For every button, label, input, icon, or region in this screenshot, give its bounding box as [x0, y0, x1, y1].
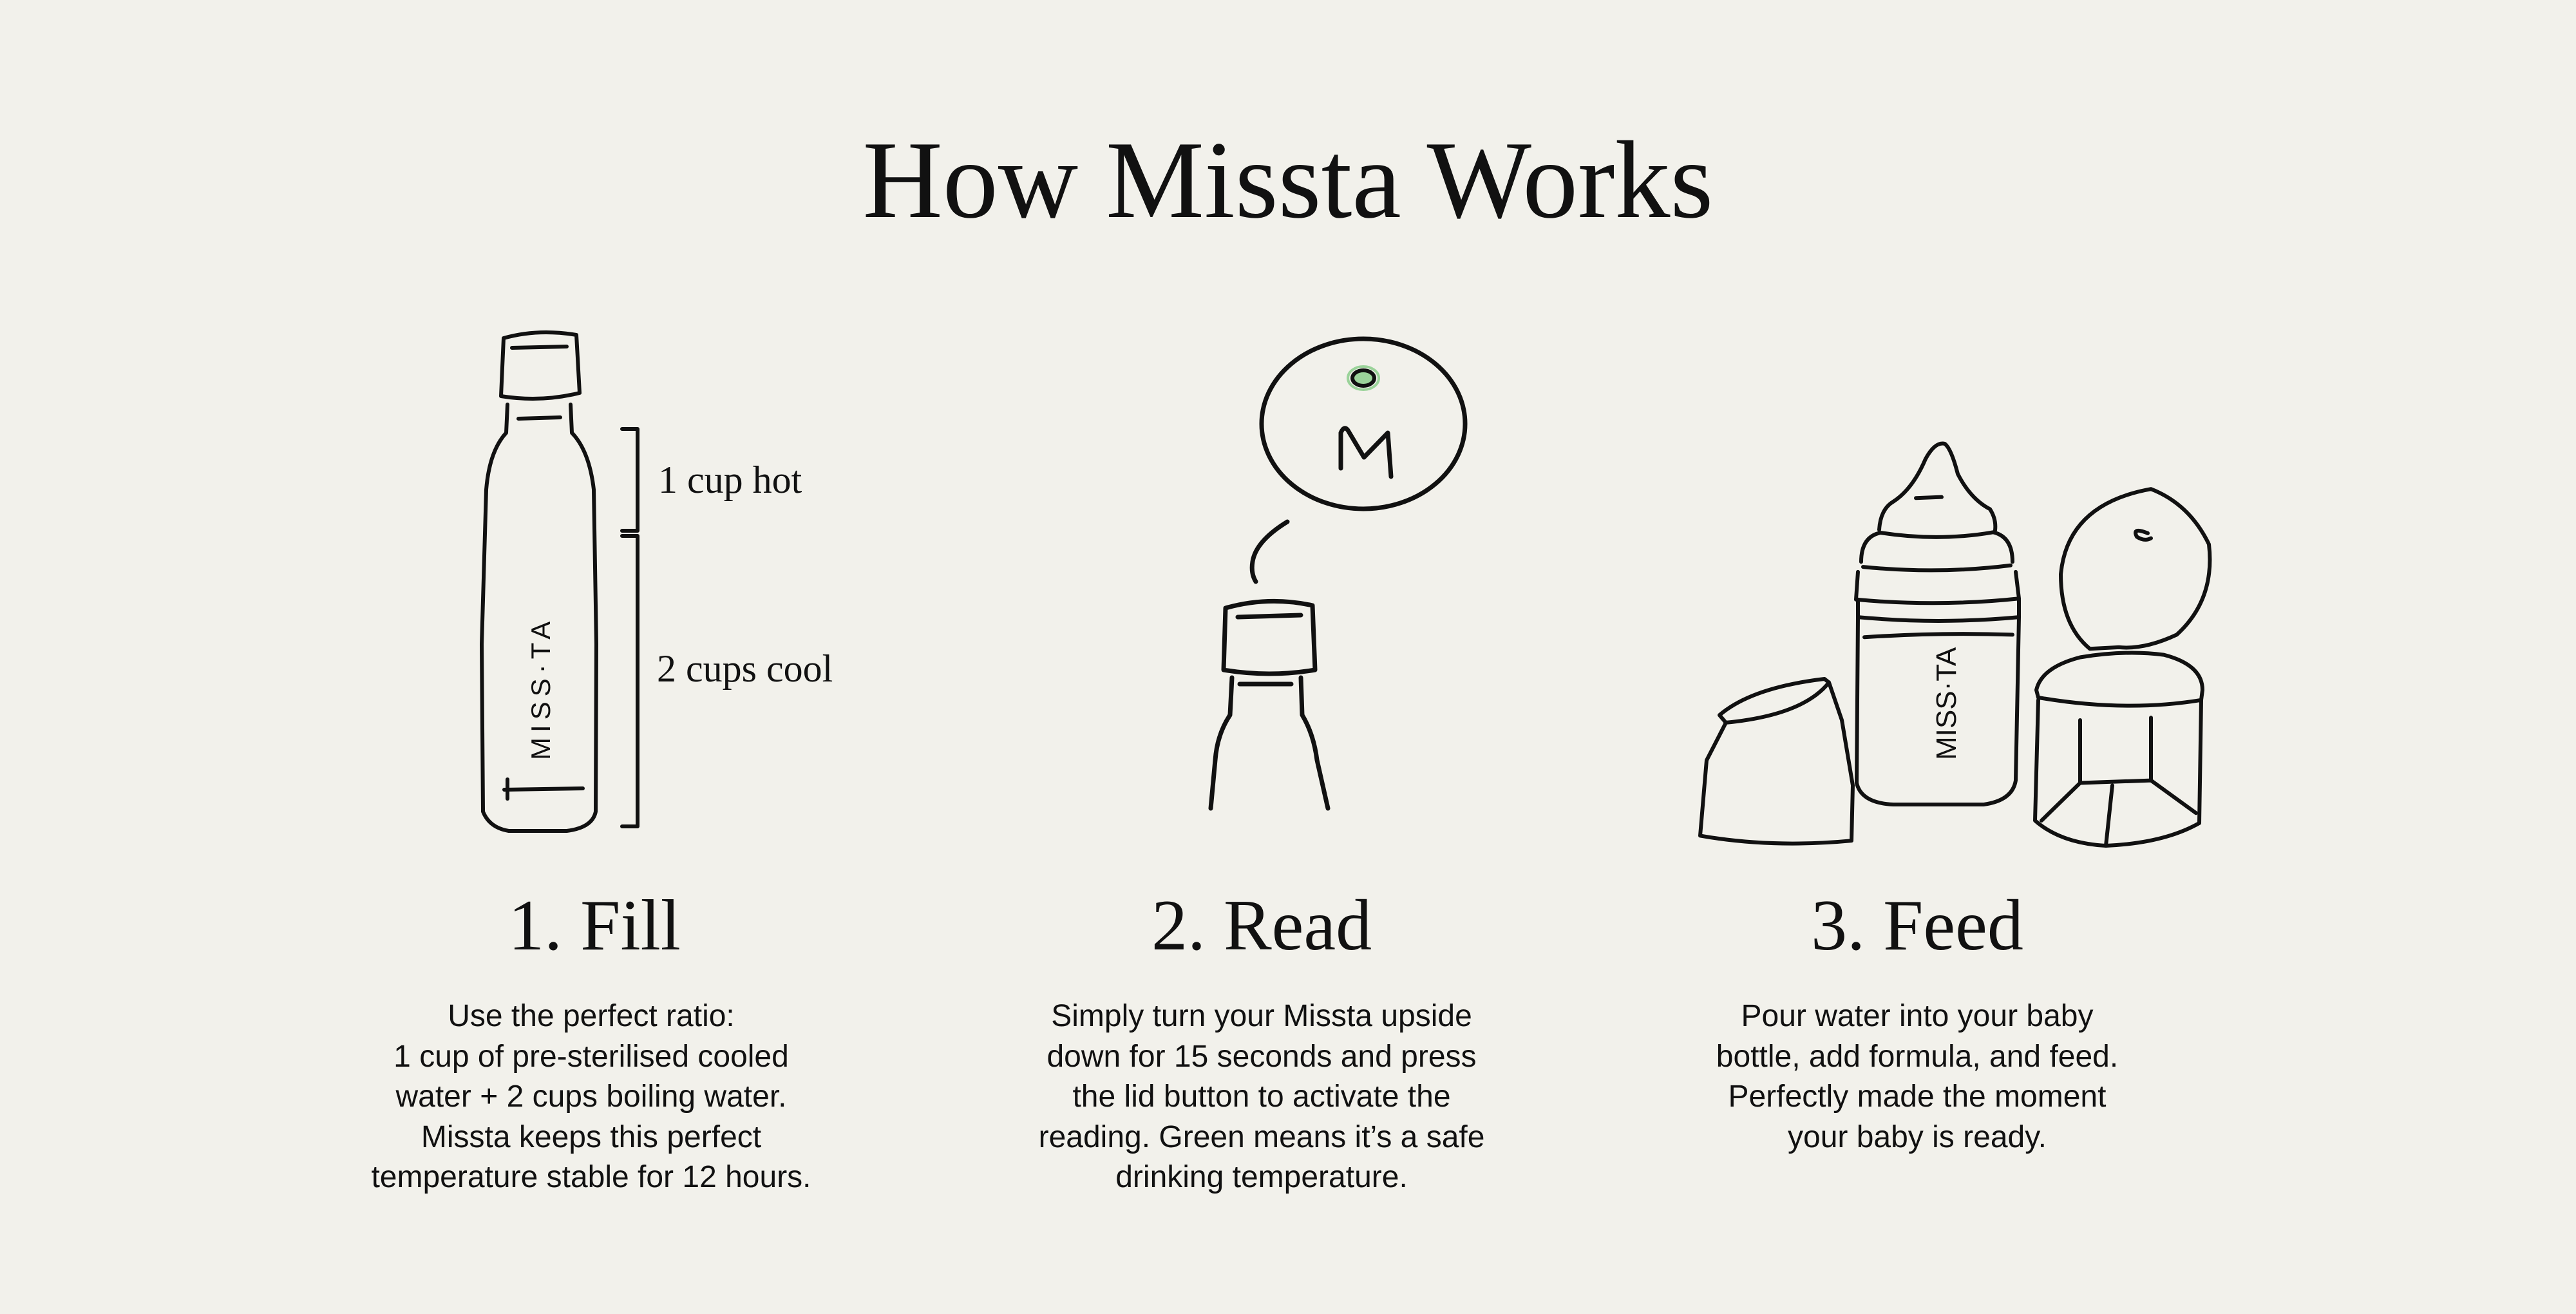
step 3 text	[1716, 999, 2118, 1154]
step 2 text: reading. Green means it’s a safe	[1039, 1119, 1484, 1154]
step 1 text: temperature stable for 12 hours.	[371, 1160, 811, 1194]
step 3 text: bottle, add formula, and feed.	[1716, 1040, 2118, 1073]
step 1 text: Missta keeps this perfect	[421, 1119, 761, 1154]
step 3 text: your baby is ready.	[1788, 1119, 2047, 1154]
step 2 heading: 2. Read	[1151, 886, 1372, 966]
step 3 text: Pour water into your baby	[1741, 999, 2093, 1033]
step 2 text: Simply turn your Missta upside	[1051, 999, 1472, 1033]
step 2 text: the lid button to activate the	[1072, 1080, 1451, 1114]
label: 2 cups cool: 2 cups cool	[657, 647, 833, 690]
step 3 heading: 3. Feed	[1811, 886, 2023, 966]
baby bottle label: MISS·TA	[1931, 647, 1962, 760]
step 2 text: down for 15 seconds and press	[1046, 1040, 1477, 1073]
step 1 text: water + 2 cups boiling water.	[395, 1080, 787, 1114]
label: 1 cup hot: 1 cup hot	[658, 459, 802, 501]
step 1 text: 1 cup of pre-sterilised cooled	[393, 1040, 789, 1073]
title: How Missta Works	[863, 119, 1713, 242]
step 1 text: Use the perfect ratio:	[448, 999, 735, 1033]
step 3 text: Perfectly made the moment	[1728, 1080, 2106, 1114]
step 2 text	[1039, 999, 1484, 1194]
step 1 text	[371, 999, 811, 1194]
step 1 heading: 1. Fill	[508, 886, 681, 966]
text: MISS·TA	[526, 616, 556, 760]
step 2 text: drinking temperature.	[1115, 1160, 1408, 1194]
